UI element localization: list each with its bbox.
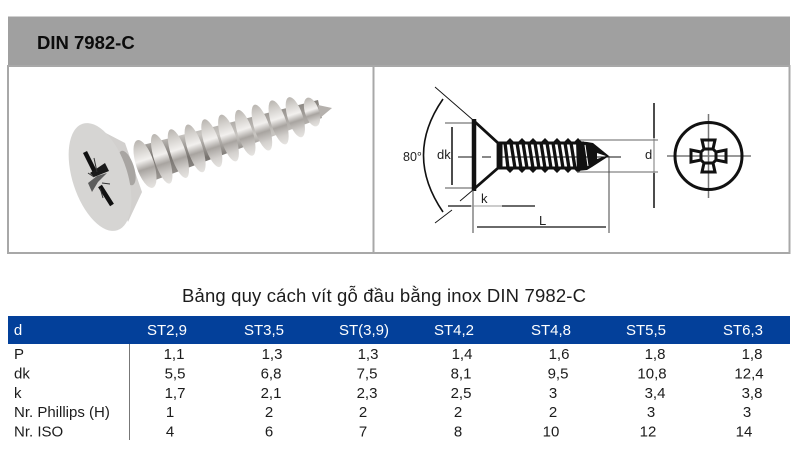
label: angle: 80°: [403, 150, 422, 164]
row: Nr. ISO: 4: [166, 424, 174, 440]
table header row: ST3,5: [244, 322, 284, 339]
row: P: 1,8: [645, 346, 665, 363]
row: P: 1,3: [262, 346, 282, 363]
table header row: ST5,5: [626, 322, 666, 339]
table header row: ST2,9: [147, 322, 187, 339]
row: k: 3: [549, 385, 557, 402]
row: dk: 10,8: [637, 366, 667, 382]
row: Nr. ISO: 10: [543, 424, 559, 440]
row: k: [14, 385, 762, 402]
row: Nr. ISO: 14: [736, 424, 752, 440]
row: Nr. ISO: Nr. ISO: [14, 424, 63, 440]
head outline: [472, 119, 476, 191]
row: Nr. Phillips: 3: [647, 404, 655, 421]
row: Nr. ISO: 6: [265, 424, 273, 440]
row: Nr. Phillips: [14, 404, 751, 421]
row: P: 1,1: [164, 346, 184, 363]
table header row: d: [14, 322, 22, 339]
row: k: 1,7: [165, 385, 185, 402]
row: k: 2,1: [261, 385, 281, 402]
table header row: ST(3,9): [339, 322, 389, 339]
row: k: 3,4: [645, 385, 665, 402]
row: k: 3,8: [742, 385, 762, 402]
row: k: k: [14, 385, 22, 402]
row: dk: 7,5: [357, 366, 377, 382]
row: Nr. Phillips: 1: [166, 404, 174, 421]
row: Nr. ISO: [14, 424, 752, 440]
label: d: d: [645, 147, 652, 162]
angle arc: [424, 99, 443, 212]
row: P: 1,6: [549, 346, 569, 363]
end view of screw head: [667, 114, 751, 198]
table header row: ST4,8: [531, 322, 571, 339]
row: Nr. Phillips: Nr. Phillips (H): [14, 404, 110, 421]
row: Nr. Phillips: 2: [359, 404, 367, 421]
row: dk: 9,5: [548, 366, 568, 382]
table header row: ST6,3: [723, 322, 763, 339]
header title: DIN 7982-C: [37, 32, 135, 53]
row: Nr. ISO: 7: [359, 424, 367, 440]
row: Nr. ISO: 12: [640, 424, 656, 440]
threaded shank: [458, 138, 609, 173]
row: Nr. Phillips: 2: [265, 404, 273, 421]
label: L: L: [539, 213, 546, 228]
panel: screw photo: [8, 66, 374, 253]
specification table: [8, 316, 790, 440]
row: dk: dk: [14, 366, 30, 382]
row: Nr. Phillips: 2: [454, 404, 462, 421]
row: dk: 8,1: [451, 366, 471, 382]
row: dk: 6,8: [261, 366, 281, 382]
row: P: [14, 346, 762, 363]
table header row: ST4,2: [434, 322, 474, 339]
row: dk: 5,5: [165, 366, 185, 382]
table title: Bảng quy cách vít gỗ đầu bằng inox DIN 7982-C: [182, 285, 586, 306]
side view of screw: [424, 87, 658, 223]
label: k: k: [481, 191, 488, 206]
screw head: [57, 115, 143, 239]
header bar: [8, 16, 790, 66]
row: k: 2,5: [451, 385, 471, 402]
row: P: 1,3: [358, 346, 378, 363]
row: k: 2,3: [357, 385, 377, 402]
row: Nr. ISO: 8: [454, 424, 462, 440]
row: Nr. Phillips: 3: [743, 404, 751, 421]
label: dk: dk: [437, 147, 451, 162]
drive recess: [85, 152, 112, 205]
row: dk: [14, 366, 764, 382]
row: P: 1,4: [452, 346, 472, 363]
dimension lines: [448, 103, 654, 233]
screw photo illustration: [57, 95, 332, 239]
row: dk: 12,4: [734, 366, 764, 382]
panel: technical drawing: [374, 66, 790, 253]
table header row: [8, 316, 790, 344]
row: P: 1,8: [742, 346, 762, 363]
row: P: P: [14, 346, 24, 363]
row: Nr. Phillips: 2: [549, 404, 557, 421]
